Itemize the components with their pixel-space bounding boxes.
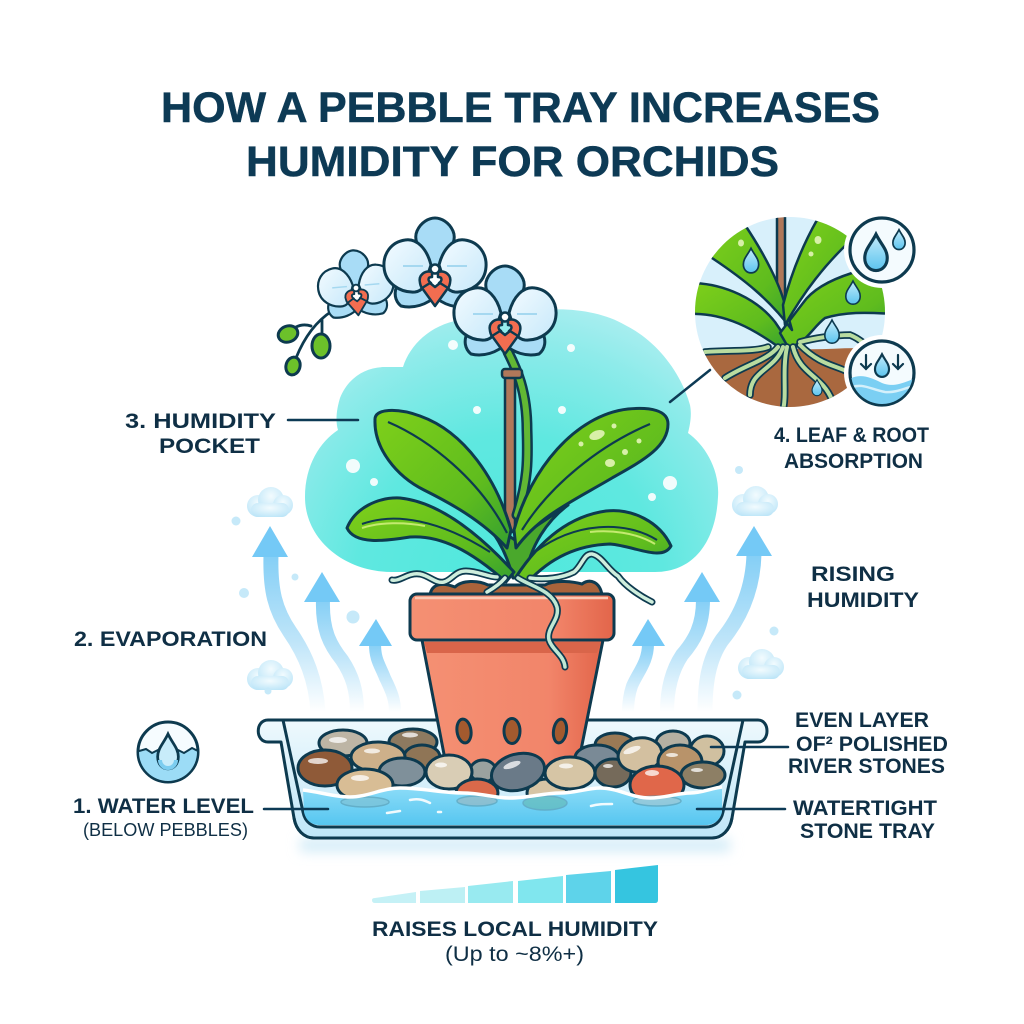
label: polished river stones: OF² POLISHED [796,733,948,756]
mist clouds and droplets [232,466,784,700]
label: 2 evaporation: 2. EVAPORATION [74,628,267,651]
label: polished river stones: EVEN LAYER [795,709,929,732]
label: rising humidity: HUMIDITY [807,589,919,612]
label: 4 leaf and root absorption: ABSORPTION [784,450,923,473]
rising humidity arrows [252,526,772,712]
pot body [422,640,603,775]
label: 1 water level: 1. WATER LEVEL [73,795,254,818]
arrow: right large [705,526,772,712]
stone highlights [308,732,703,781]
arrow: right medium [667,572,720,712]
water level [303,787,722,825]
leaf: upper left [375,410,511,548]
inset stake [777,212,785,307]
humidity cloud [305,309,718,572]
soil [430,581,602,595]
label: watertight stone tray [697,797,937,843]
label: watertight stone tray: WATERTIGHT [793,797,937,820]
label: rising humidity [807,563,919,612]
orchid flowers [315,218,556,355]
label: 3 humidity pocket: 3. HUMIDITY [125,410,276,433]
tray lower rim [294,818,732,838]
inset circle: leaf and root absorption [695,217,885,407]
inset roots [705,335,866,410]
orchid stake and stem [502,352,527,532]
label: 1 water level [73,795,328,840]
title: HUMIDITY FOR ORCHIDS [246,138,779,186]
arrow: right small [628,619,665,712]
leaf: middle right [516,511,671,582]
label: polished river stones: RIVER STONES [788,755,945,778]
leaf: middle left [347,498,514,582]
caption: raises local humidity: (Up to ~8%+) [445,943,584,966]
label: 3 humidity pocket: POCKET [159,435,260,458]
submerged stones [341,796,681,810]
pot rim [410,594,614,640]
caption: raises local humidity [372,918,658,966]
arrow: left small [359,619,395,712]
inset leaves [695,282,785,346]
humidity scale bars [372,865,658,903]
tray glass body [258,720,767,838]
icon: water absorption [844,335,916,407]
label: 4 leaf and root absorption: 4. LEAF & ROOT [774,424,929,447]
orchid leaves [347,408,671,582]
inset droplets [743,248,860,396]
title: HOW A PEBBLE TRAY INCREASES [161,84,880,132]
caption: raises local humidity: RAISES LOCAL HUMIDITY [372,918,658,941]
icon: water level [136,722,200,790]
flower spike and buds [276,311,332,377]
label: rising humidity: RISING [811,563,895,586]
leaf: upper right [514,408,668,548]
aerial roots [392,554,652,667]
pot drainage holes [455,718,568,744]
label: 1 water level: (BELOW PEBBLES) [83,820,248,840]
arrow: left large [252,526,318,712]
watertight tray [258,720,767,852]
icon: water droplets [844,212,920,288]
inner leaf base [462,505,568,578]
label: 4 leaf and root absorption [670,370,929,473]
inset soil [704,348,854,407]
label: watertight stone tray: STONE TRAY [800,820,935,843]
label: 3 humidity pocket [125,410,358,458]
tray inner wall [283,720,743,827]
title [161,84,880,186]
even layer of river stones [298,729,725,807]
label: polished river stones [711,709,948,778]
arrow: left medium [304,572,357,712]
clay pot [410,594,614,775]
tray shadow [300,838,730,852]
